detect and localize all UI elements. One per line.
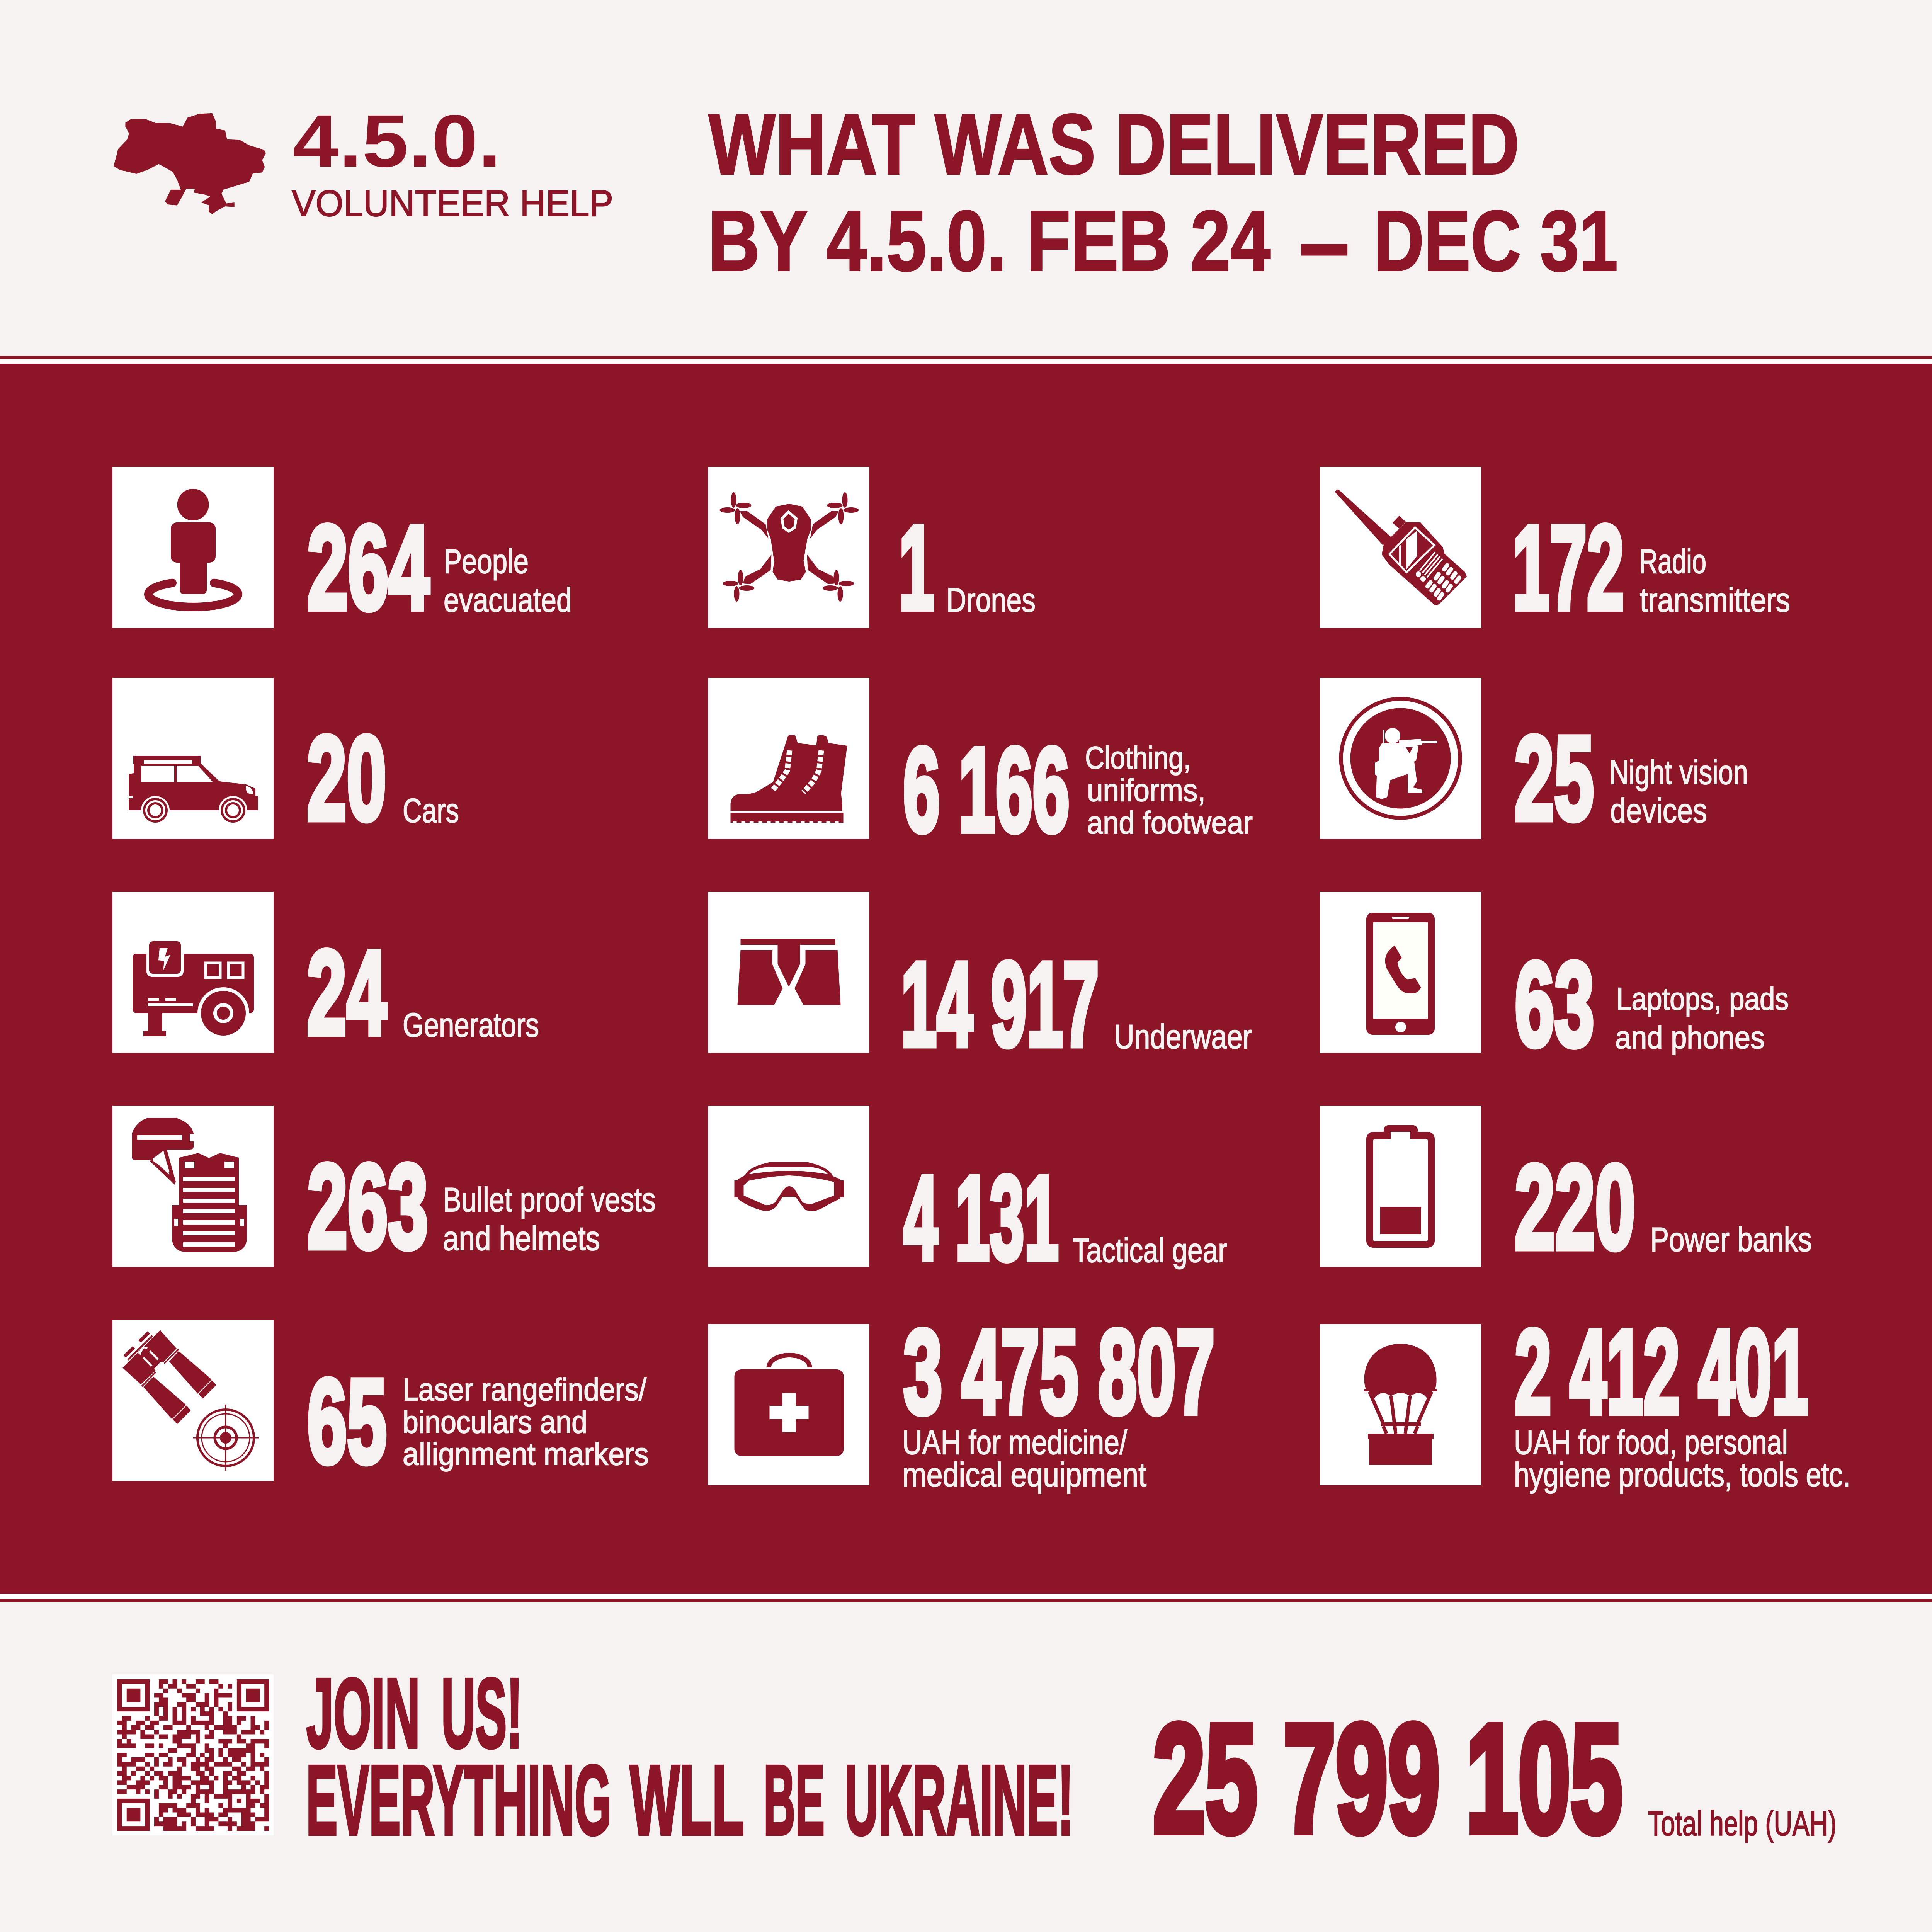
footer call to action: EVERYTHING <box>306 1745 611 1855</box>
label: people evacuated <box>444 542 572 619</box>
icon: parachute with box <box>1320 1324 1481 1485</box>
number: 65: 65 <box>307 1354 387 1488</box>
number: 25: 25 <box>1514 711 1594 845</box>
logo text: 4.5.0.: 4.5.0. <box>293 99 501 182</box>
label: tactical gear: Tactical gear <box>1073 1231 1227 1269</box>
label: night vision devices <box>1609 753 1748 830</box>
title: BY 4.5.0. FEB 24 <box>708 193 1270 289</box>
stat: night vision devices <box>1320 678 1748 845</box>
icon: binoculars and target <box>112 1320 274 1481</box>
label: people evacuated: evacuated <box>444 581 572 619</box>
label: drones: Drones <box>946 581 1036 619</box>
stat: cars <box>112 678 459 845</box>
logo subtitle: volunteer help: VOLUNTEER HELP <box>292 183 613 224</box>
stat: UAH for food and hygiene <box>1320 1304 1850 1494</box>
icon: car <box>112 678 274 839</box>
number: 264: 264 <box>307 500 430 634</box>
stat: radio transmitters <box>1320 467 1790 634</box>
icon: boots <box>708 678 869 839</box>
number: 20: 20 <box>307 711 386 845</box>
label: radio transmitters <box>1639 542 1790 619</box>
number: 4 131: 4 131 <box>903 1151 1059 1285</box>
icon: drone <box>708 467 869 628</box>
stat: UAH for medicine <box>708 1304 1215 1494</box>
number: 63: 63 <box>1515 937 1594 1071</box>
icon: radio <box>1320 467 1481 628</box>
title <box>708 97 1618 291</box>
number: 3 475 807: 3 475 807 <box>903 1304 1215 1439</box>
label: laser rangefinders, binoculars, alignment markers: allignment markers <box>403 1437 649 1472</box>
total number: 25 799 105: 25 799 105 <box>1153 1693 1622 1864</box>
icon: medical kit <box>708 1324 869 1485</box>
stat: underwear <box>708 892 1252 1071</box>
number: 220: 220 <box>1515 1140 1635 1274</box>
icon: goggles <box>708 1106 869 1267</box>
stat: tactical gear <box>708 1106 1227 1285</box>
stat: clothing, uniforms and footwear <box>708 678 1253 857</box>
title: DEC 31 <box>1374 193 1618 289</box>
number: 1: 1 <box>899 500 934 634</box>
footer call to action: JOIN <box>306 1658 420 1769</box>
label: underwear: Underwaer <box>1114 1017 1252 1056</box>
number: 172: 172 <box>1512 500 1624 634</box>
label: UAH for medicine <box>902 1423 1146 1494</box>
label: UAH for food, personal hygiene products, tools <box>1514 1423 1850 1494</box>
label: clothing, uniforms, and footwear <box>1085 740 1253 840</box>
title: WHAT WAS DELIVERED <box>709 97 1519 192</box>
label: people evacuated: People <box>444 542 529 580</box>
icon: generator <box>112 892 274 1053</box>
stat: drones <box>708 467 1036 634</box>
label: laser rangefinders, binoculars, alignment markers: Laser rangefinders/ <box>403 1372 646 1407</box>
number: 263: 263 <box>307 1139 428 1273</box>
label: laser rangefinders, binoculars, alignment markers <box>403 1372 649 1472</box>
stat: people evacuated <box>112 467 572 634</box>
icon: Ukraine map <box>114 113 266 214</box>
text: UKRAINE! <box>845 1745 1073 1855</box>
label: night vision devices: Night vision <box>1609 753 1748 791</box>
label: bullet proof vests and helmets: Bullet proof vests <box>443 1180 656 1219</box>
footer call to action <box>306 1658 1073 1855</box>
label: UAH for food, personal hygiene products, tools: hygiene products, tools etc. <box>1514 1456 1850 1494</box>
stat: generators <box>112 892 539 1060</box>
label: generators: Generators <box>403 1006 539 1044</box>
label: cars: Cars <box>403 791 459 830</box>
stat: power banks <box>1320 1106 1812 1274</box>
icon: person on location ring <box>112 467 274 628</box>
footer call to action: US! <box>441 1658 522 1769</box>
label: UAH for medicine: medical equipment <box>902 1456 1146 1494</box>
label: radio transmitters: transmitters <box>1640 581 1790 619</box>
label: bullet proof vests and helmets: and helmets <box>443 1219 600 1257</box>
label: radio transmitters: Radio <box>1639 542 1706 580</box>
label: laptops, pads and phones <box>1615 981 1789 1055</box>
icon: smartphone <box>1320 892 1481 1053</box>
label: laptops, pads and phones: Laptops, pads <box>1616 981 1789 1017</box>
panel: main red band <box>0 364 1932 1594</box>
label: clothing, uniforms, and footwear: uniforms, <box>1087 773 1206 808</box>
label: bullet proof vests and helmets <box>443 1180 656 1257</box>
label: power banks: Power banks <box>1650 1220 1812 1259</box>
label: clothing, uniforms, and footwear: and footwear <box>1087 805 1253 840</box>
icon: battery <box>1320 1106 1481 1267</box>
label: night vision devices: devices <box>1610 791 1707 830</box>
label: clothing, uniforms, and footwear: Clothing, <box>1085 740 1191 776</box>
label: laptops, pads and phones: and phones <box>1615 1020 1765 1055</box>
label: total help (UAH): Total help (UAH) <box>1648 1804 1837 1843</box>
stat: bullet proof vests and helmets <box>112 1106 656 1273</box>
number: 24: 24 <box>307 925 387 1060</box>
number: 6 166: 6 166 <box>903 723 1070 857</box>
footer call to action: WLL <box>630 1745 744 1855</box>
stat: laser rangefinders <box>112 1320 649 1488</box>
footer call to action: BE <box>764 1745 825 1855</box>
stat: laptops, pads and phones <box>1320 892 1789 1071</box>
QR code <box>112 1674 274 1835</box>
label: laser rangefinders, binoculars, alignment markers: binoculars and <box>403 1405 587 1440</box>
number: 14 917: 14 917 <box>901 937 1099 1071</box>
title: — <box>1302 196 1347 291</box>
icon: underwear <box>708 892 869 1053</box>
label: UAH for food, personal hygiene products, tools: UAH for food, personal <box>1514 1423 1788 1461</box>
label: UAH for medicine: UAH for medicine/ <box>902 1423 1127 1461</box>
icon: soldier in night vision scope <box>1320 678 1481 839</box>
icon: helmet and vest <box>112 1106 274 1267</box>
